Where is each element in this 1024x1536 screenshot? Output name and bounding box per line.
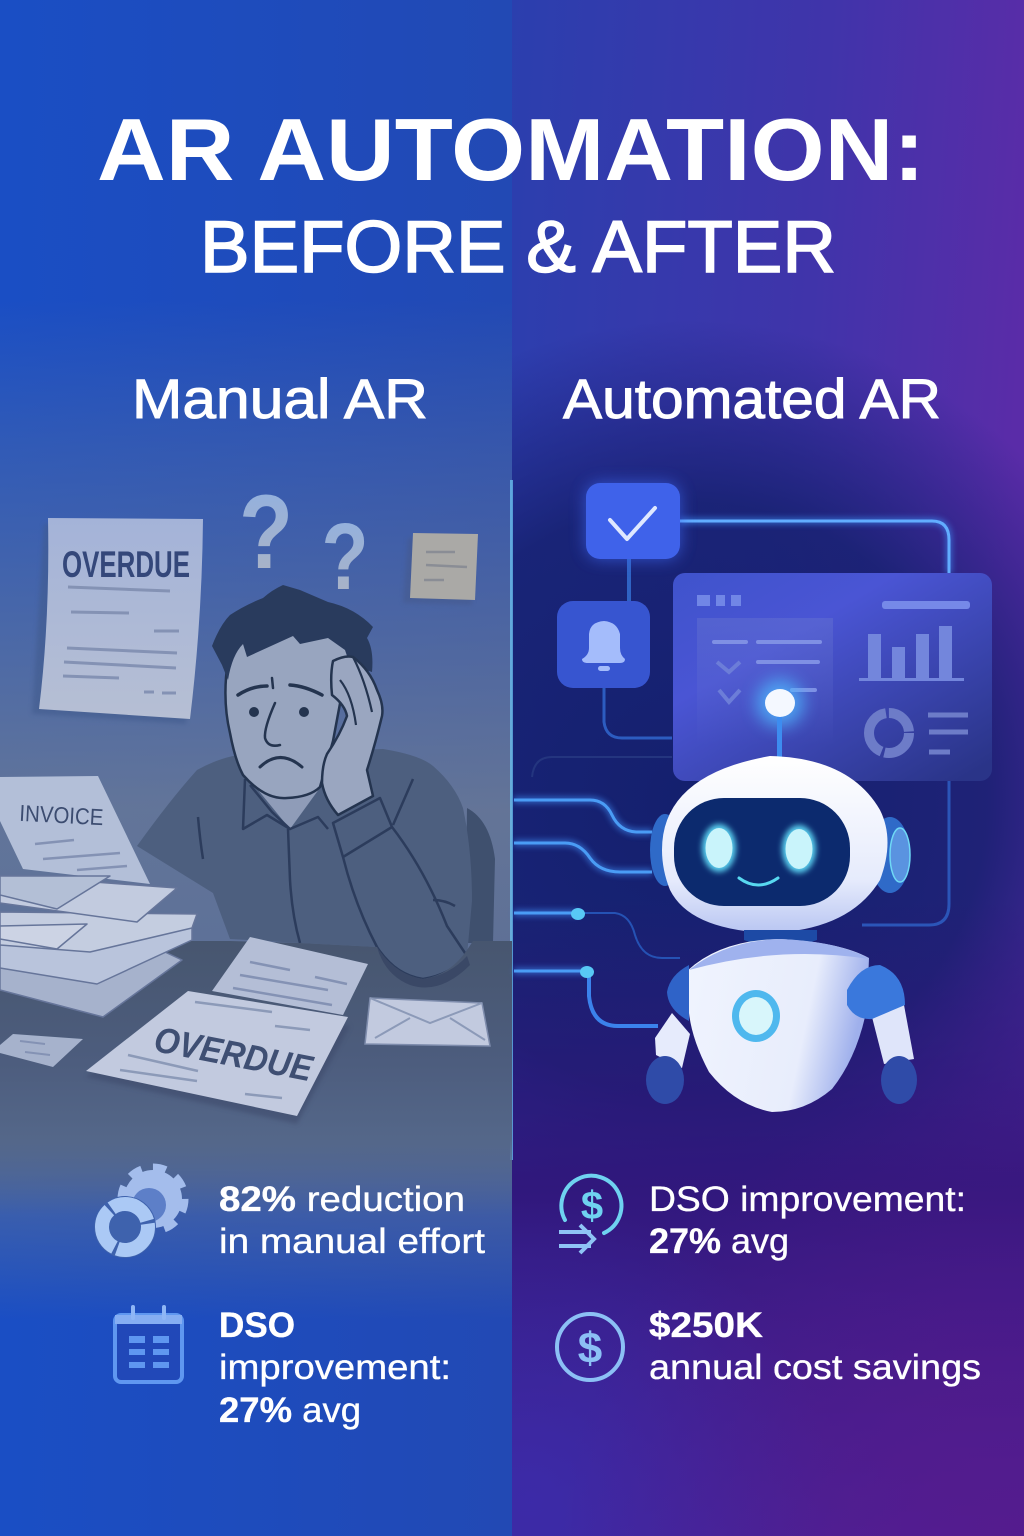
desk — [0, 941, 512, 1215]
check tile — [586, 483, 680, 559]
robot body — [687, 939, 869, 1112]
icon: gears — [94, 1168, 184, 1258]
question marks — [239, 474, 368, 610]
stat: DSO improvement left: 27% avg — [219, 1391, 361, 1430]
stat: DSO improvement right: 27% avg — [649, 1222, 789, 1261]
icon: calendar — [115, 1307, 182, 1382]
illustration: stressed worker at desk — [0, 474, 512, 1215]
chest light — [732, 990, 780, 1042]
overdue paper on desk: OVERDUE — [151, 1018, 317, 1089]
title: BEFORE & AFTER — [200, 207, 836, 288]
overdue paper on desk — [86, 991, 350, 1124]
robot neck — [744, 930, 817, 948]
right panel background — [512, 0, 1024, 1536]
glowing divider — [510, 480, 513, 1160]
invoice paper: INVOICE — [19, 800, 104, 830]
hand on cheek — [322, 656, 382, 815]
robot visor — [674, 798, 850, 906]
envelope — [365, 998, 490, 1046]
paper stack — [0, 876, 197, 1017]
robot shoulders — [667, 965, 905, 1021]
letter on desk — [212, 937, 368, 1015]
icon: dollar coin — [557, 1314, 623, 1380]
stat: $250K savings: annual cost savings — [649, 1348, 981, 1387]
robot arms — [646, 1005, 917, 1104]
stat text: 82% reduction — [219, 1180, 465, 1219]
icon: dollar with arrows: $ — [581, 1184, 603, 1228]
torso — [137, 749, 472, 979]
title: AR AUTOMATION: — [97, 100, 925, 199]
circuit lines — [514, 521, 949, 1026]
stat: DSO improvement left — [115, 1306, 451, 1430]
robot face — [702, 824, 816, 885]
stat text: $250K — [649, 1306, 763, 1345]
heading: Automated AR: Automated AR — [563, 367, 941, 430]
overdue notice on wall: OVERDUE — [62, 544, 190, 585]
stat: $250K savings — [557, 1306, 981, 1387]
robot body top shading — [689, 939, 869, 970]
stat text: DSO — [219, 1306, 295, 1345]
stat text: DSO improvement: — [649, 1180, 966, 1219]
overdue notice on wall — [32, 518, 203, 724]
head — [225, 622, 350, 798]
illustration: AI robot and dashboard — [514, 483, 992, 1112]
stat: DSO improvement left: improvement: — [219, 1348, 451, 1387]
antenna — [756, 679, 804, 758]
shirt details — [198, 779, 413, 943]
collar — [243, 779, 328, 829]
sticky note — [403, 533, 478, 605]
bell tile — [557, 601, 650, 688]
circuit nodes — [571, 908, 594, 978]
neck — [258, 785, 322, 829]
question marks: ? — [239, 474, 293, 591]
robot head — [662, 756, 888, 933]
icon: dollar with arrows — [559, 1176, 621, 1253]
forearm and sleeve — [333, 798, 467, 979]
small note — [0, 1034, 83, 1067]
face — [238, 678, 322, 767]
dashboard — [673, 573, 992, 781]
robot ears — [650, 814, 910, 893]
chair — [465, 808, 495, 943]
heading: Manual AR: Manual AR — [132, 367, 428, 430]
stat: DSO improvement right — [559, 1176, 966, 1261]
icon: dollar coin: $ — [578, 1324, 602, 1373]
hair — [212, 585, 373, 680]
stat: 82% reduction in manual effort — [94, 1168, 485, 1261]
left panel background — [0, 0, 512, 1536]
title — [97, 100, 925, 288]
invoice paper — [0, 776, 150, 884]
stat: 82% reduction in manual effort: in manual effort — [219, 1222, 485, 1261]
elbow shadow — [377, 947, 470, 988]
question marks: ? — [322, 504, 368, 610]
